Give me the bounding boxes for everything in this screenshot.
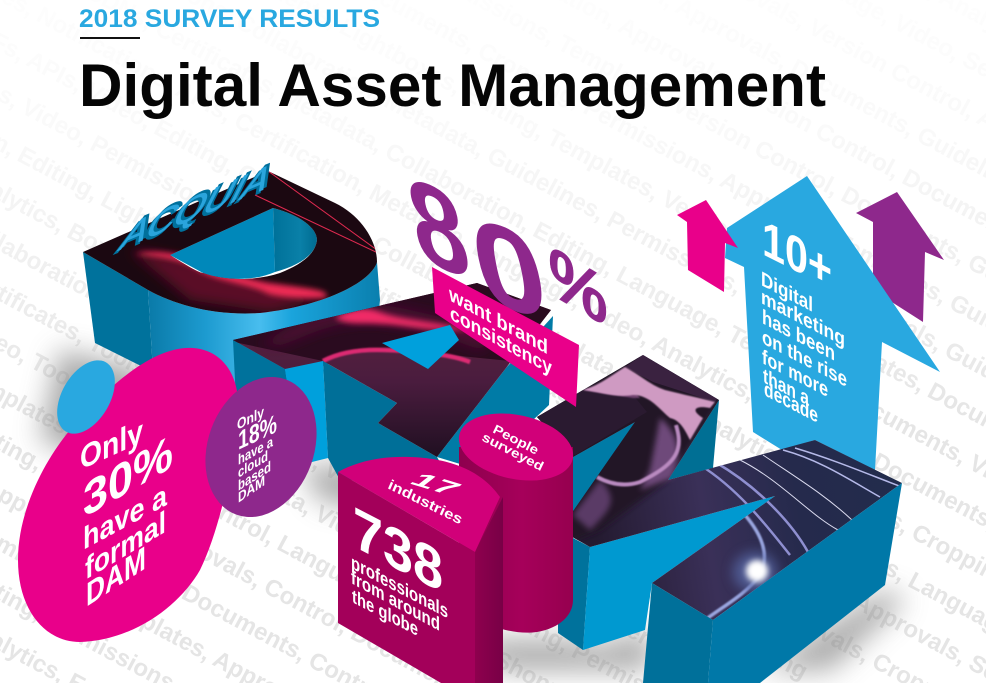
pink circle: 30%: 30% xyxy=(83,423,173,528)
M top face xyxy=(530,350,910,630)
purple circle: 18%: Only xyxy=(237,404,264,434)
purple rear arrow xyxy=(856,192,944,322)
arrow caption: for more xyxy=(762,344,828,402)
letter M block xyxy=(530,350,910,683)
80% figure xyxy=(397,147,608,349)
arrow caption: on the rise xyxy=(762,324,847,392)
letter A block xyxy=(225,275,560,480)
blue main arrow with text xyxy=(725,176,940,470)
subtitle: 2018 SURVEY RESULTS xyxy=(79,5,380,33)
arrow caption: has been xyxy=(762,304,835,366)
10+: 10+ xyxy=(762,210,832,300)
purple circle: 18% xyxy=(187,361,335,533)
arrow caption: marketing xyxy=(761,284,845,351)
D top face xyxy=(80,165,380,320)
professionals from around the globe: from around xyxy=(351,567,440,636)
arrow caption xyxy=(761,266,847,428)
pink cylinder: people surveyed: surveyed xyxy=(479,430,546,474)
80% figure: 8 xyxy=(397,147,480,308)
D hole xyxy=(170,208,275,279)
icon: Acquia logo: ACQUIA xyxy=(109,157,278,263)
letter D block xyxy=(83,171,380,384)
738: 738 xyxy=(353,494,443,606)
professionals from around the globe: the globe xyxy=(352,586,418,641)
pink block: 738 professionals xyxy=(338,457,503,683)
banner: want brand consistency: want brand xyxy=(448,282,548,359)
17 industries: 17 xyxy=(404,469,468,499)
arrow caption: than a xyxy=(763,363,810,411)
purple circle: 18%: have a xyxy=(238,433,273,469)
purple circle: 18%: 18% xyxy=(238,408,277,456)
pink small arrow xyxy=(677,200,738,292)
A counter triangle xyxy=(382,325,459,369)
purple circle: 18%: based xyxy=(238,459,271,495)
block top face xyxy=(338,457,500,552)
arrow caption: decade xyxy=(764,376,818,428)
pink circle: 30%: Only xyxy=(80,413,144,478)
pink circle: 30%: DAM xyxy=(86,538,146,614)
80% figure: 0 xyxy=(460,188,559,349)
icon: Acquia logo: ACQUIA xyxy=(115,151,284,257)
drop shadows xyxy=(40,350,905,670)
pink block: 738 professionals: industries xyxy=(386,477,465,528)
banner: want brand consistency: consistency xyxy=(450,301,552,380)
M front block xyxy=(708,483,902,683)
D curved side xyxy=(148,262,380,400)
D left side xyxy=(83,252,153,372)
pink circle: 30% xyxy=(18,348,238,642)
banner: want brand consistency xyxy=(432,267,579,407)
block right face xyxy=(475,497,503,683)
80% figure: % xyxy=(548,229,608,342)
title block xyxy=(79,5,826,119)
pink cylinder: people surveyed xyxy=(453,404,579,633)
icon: Acquia logo: ACQUIA xyxy=(112,154,281,260)
pink circle: 30%: formal xyxy=(85,505,166,587)
small blue dot xyxy=(45,350,127,444)
M inner sides xyxy=(668,400,719,480)
arrow caption: Digital xyxy=(761,266,813,317)
pink cylinder: people surveyed: People xyxy=(490,422,541,458)
professionals from around the globe: professionals xyxy=(351,552,448,623)
main title: Digital Asset Management xyxy=(79,52,826,119)
block left face xyxy=(338,472,475,683)
pink circle: 30%: have a xyxy=(83,477,167,557)
purple circle: 18%: DAM xyxy=(238,472,265,507)
A top face xyxy=(233,283,551,457)
purple circle: 18%: cloud xyxy=(238,448,268,482)
A sides xyxy=(233,340,300,465)
